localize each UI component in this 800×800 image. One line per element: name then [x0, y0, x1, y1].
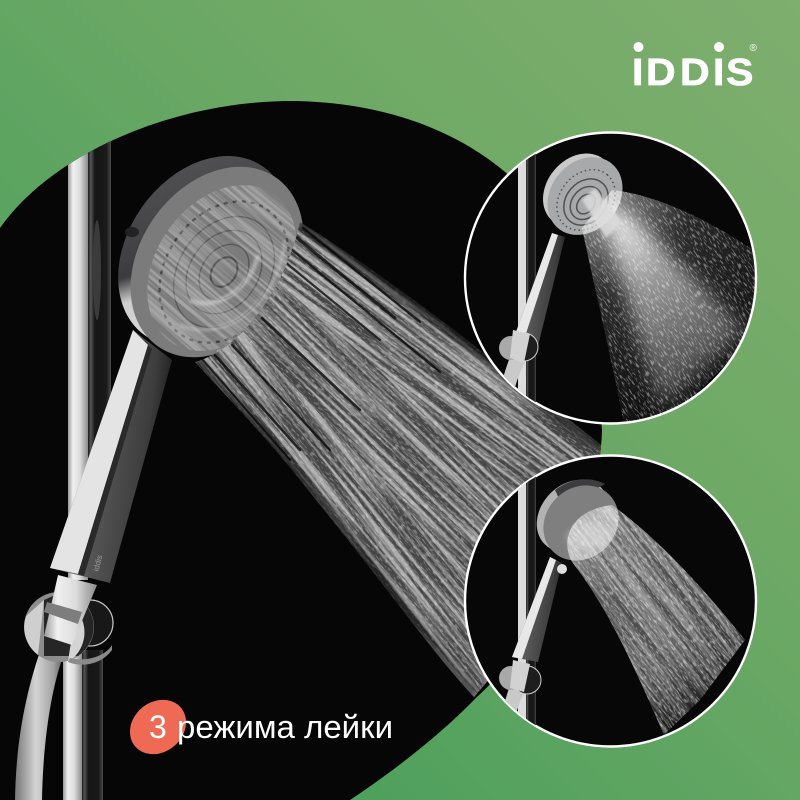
rail: [518, 154, 536, 402]
water spray: rain: [567, 505, 745, 735]
panel: spray mode circle top: [464, 131, 758, 425]
water overlay on the face: [147, 185, 296, 351]
heading text: режима лейки: [177, 709, 393, 745]
handle: [516, 233, 565, 346]
badge: [119, 689, 197, 765]
water spray: mist: [582, 190, 755, 422]
handle brand mark: iddis: [92, 554, 104, 572]
heading number: 3: [149, 709, 167, 745]
bracket: [499, 330, 538, 363]
water spray: main: [195, 222, 602, 697]
panel: main black photo shape: [0, 101, 602, 800]
dark gaps between jets: [203, 228, 440, 460]
logo: IDDIS: ®: [750, 43, 758, 54]
callout: 3 режима лейки: [119, 689, 393, 765]
panel: spray mode circle bottom: [465, 456, 769, 750]
shower head: [536, 479, 618, 574]
handle: [512, 557, 562, 662]
rail: [518, 476, 536, 726]
shower head: [543, 154, 622, 235]
bracket: [499, 660, 541, 694]
logo: IDDIS: IDDIS: [632, 51, 753, 94]
handle: [50, 330, 172, 583]
mode switch button: [214, 349, 227, 376]
bracket: [24, 592, 113, 665]
shower rail: [63, 140, 111, 800]
dark fade toward edges: [300, 222, 610, 452]
hose: [15, 643, 67, 800]
handle collar: [44, 575, 97, 645]
bright jet core: [565, 522, 615, 548]
shower head: [118, 156, 302, 358]
hose: [504, 360, 525, 387]
concentrated jets: [582, 188, 622, 238]
hose: [505, 689, 523, 712]
